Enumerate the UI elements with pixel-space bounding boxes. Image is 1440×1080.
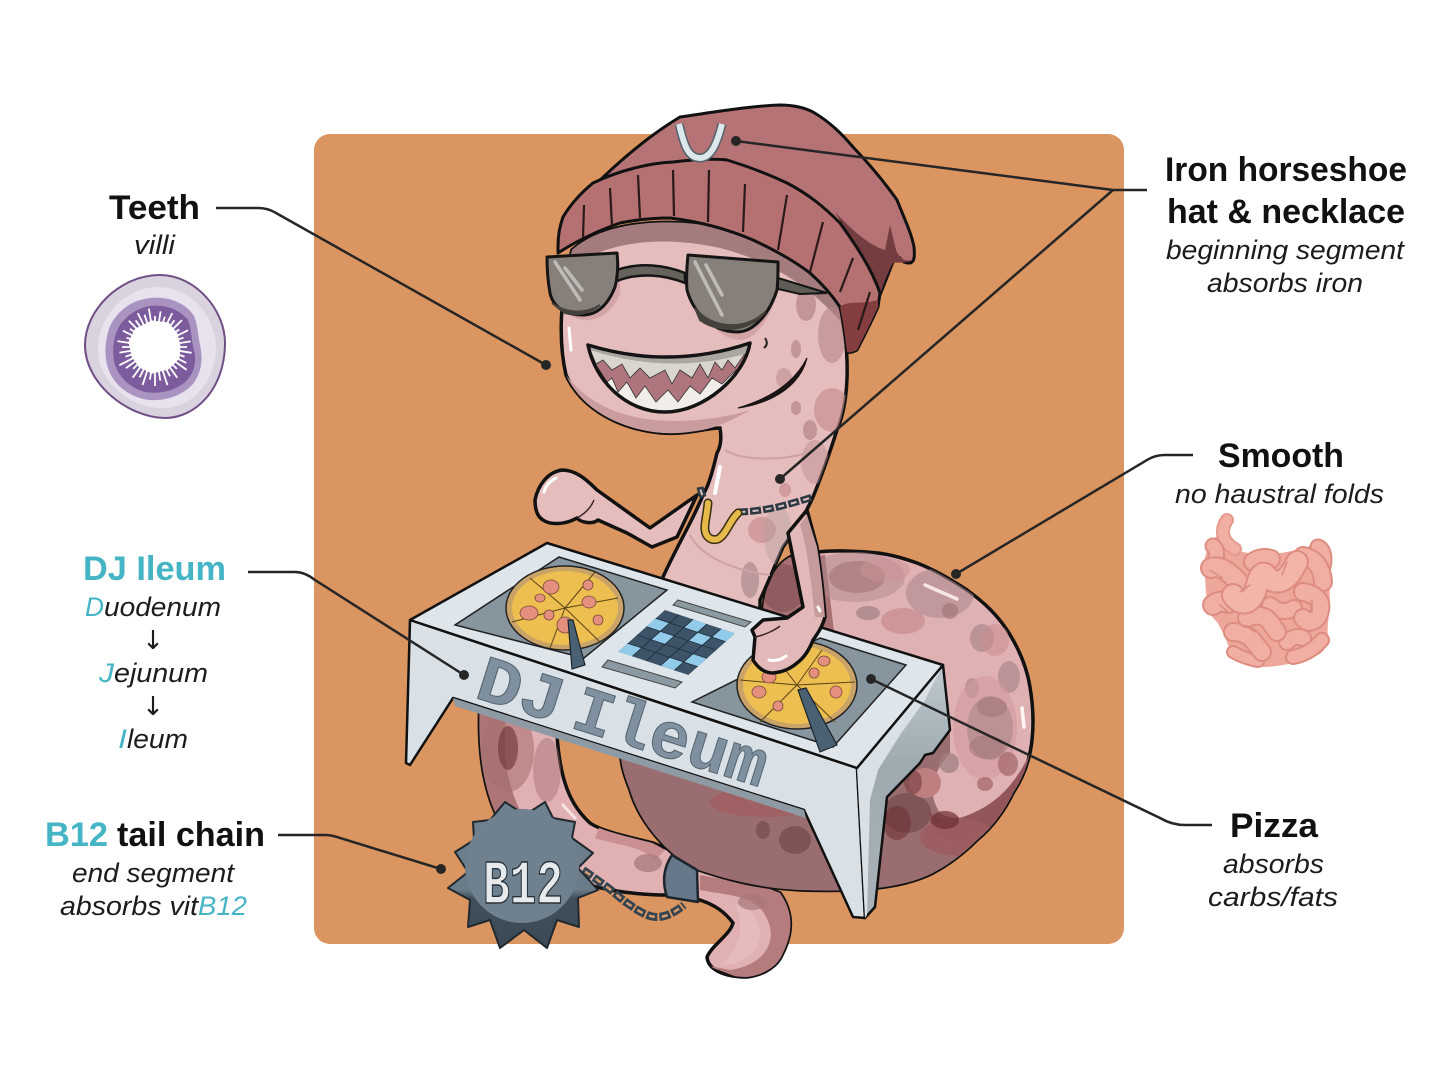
worm neck and head (535, 222, 850, 640)
icon: small intestine (1205, 520, 1330, 667)
leader lines (216, 141, 1212, 869)
label: DJ Ileum sequence: ↓ (142, 692, 164, 722)
mixer sliders (602, 600, 751, 688)
label: Pizza (1208, 807, 1338, 912)
deck label: DJ (467, 645, 573, 743)
worm coil body (610, 551, 1040, 900)
label: iron horseshoe hat and necklace (1165, 151, 1407, 298)
DJ deck (406, 543, 950, 918)
label: iron horseshoe hat and necklace: absorbs iron (1207, 268, 1363, 298)
gold horseshoe necklace (700, 487, 813, 540)
B12 spiked ball (448, 802, 598, 948)
illustration: DJ Ileum worm (406, 105, 1040, 980)
label: DJ Ileum sequence: uodenum (104, 592, 221, 622)
worm tail (470, 700, 800, 980)
smile crease (738, 358, 807, 408)
worm hand on pizza (752, 510, 825, 673)
icon: villi cross-section (85, 275, 225, 418)
sunglasses (547, 253, 827, 340)
label: B12 tail chain: tail chain (117, 816, 265, 854)
label: DJ Ileum sequence: J (98, 658, 115, 688)
label: Smooth: Smooth (1218, 437, 1344, 475)
label: Pizza: Pizza (1230, 807, 1319, 845)
iron horseshoe on hat (679, 124, 722, 158)
label: Teeth: Teeth (109, 189, 200, 227)
left turntable with pizza (455, 557, 667, 669)
label: B12 tail chain: end segment (72, 858, 236, 888)
label: B12 tail chain: absorbs vit (60, 891, 200, 921)
label: Teeth: villi (134, 230, 176, 260)
label: DJ Ileum sequence: I (118, 724, 128, 754)
label: DJ Ileum sequence: D (85, 592, 104, 622)
ankle cuff (664, 855, 698, 902)
label: iron horseshoe hat and necklace: beginning segment (1166, 235, 1406, 265)
leader line end dots (436, 136, 961, 874)
deck label: Ileum (563, 675, 776, 806)
label: iron horseshoe hat and necklace: hat & necklace (1167, 193, 1405, 231)
label: Smooth (1175, 437, 1384, 509)
beanie hat (558, 105, 914, 352)
label: DJ Ileum sequence (83, 550, 226, 754)
label: DJ Ileum sequence: ↓ (142, 626, 164, 656)
label: Teeth (109, 189, 200, 260)
label: DJ Ileum sequence: ejunum (114, 658, 208, 688)
label: Smooth: no haustral folds (1175, 479, 1384, 509)
B12 spiked ball: B12 (483, 851, 563, 922)
chain from cuff to ball (583, 870, 684, 917)
mixer button grid (618, 610, 735, 675)
label: Pizza: carbs/fats (1208, 882, 1338, 912)
label: Pizza: absorbs (1223, 849, 1324, 879)
shark teeth mouth (586, 341, 752, 414)
label: B12 tail chain: B12 (198, 891, 247, 921)
right turntable with pizza (692, 638, 906, 752)
orange background panel (314, 134, 1124, 944)
cheek mark (764, 338, 767, 348)
label: iron horseshoe hat and necklace: Iron horseshoe (1165, 151, 1407, 189)
label: DJ Ileum sequence: DJ Ileum (83, 550, 226, 588)
label: B12 tail chain: B12 (45, 816, 108, 854)
label: DJ Ileum sequence: leum (127, 724, 188, 754)
label: B12 tail chain (45, 816, 265, 921)
deck label (467, 645, 776, 806)
